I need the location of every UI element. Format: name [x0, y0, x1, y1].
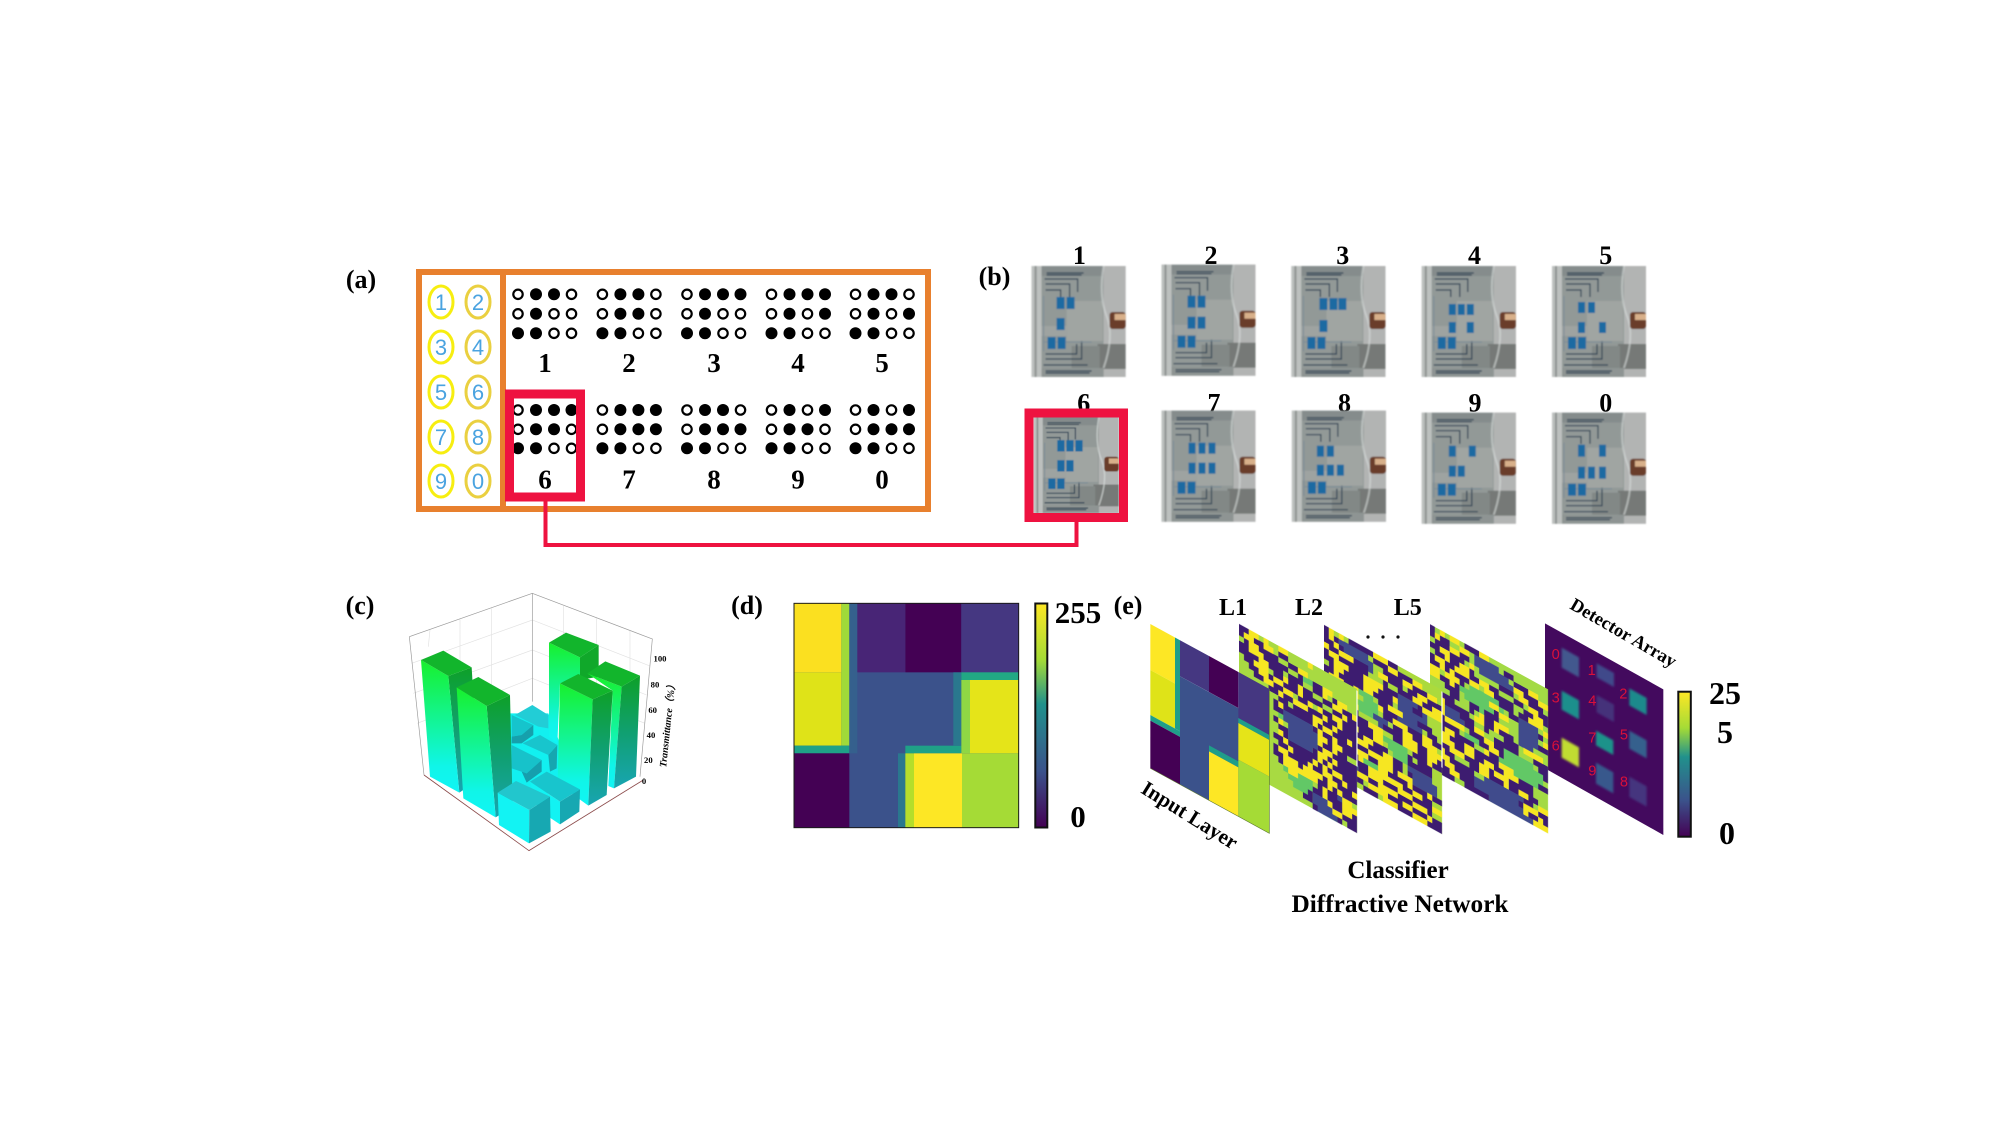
layer titles: L5	[1394, 595, 1422, 621]
panel label (d): (d)	[731, 591, 763, 620]
photo digit labels: 7	[1208, 388, 1220, 418]
keypad digit ellipses: 8	[472, 425, 484, 450]
detector indices: 0	[1552, 647, 1560, 663]
panel label (b): (b)	[979, 262, 1010, 291]
digit labels for dot patterns: 7	[622, 464, 636, 494]
layer titles	[1219, 595, 1422, 621]
photo digit labels	[1073, 241, 1612, 418]
photo digit labels: 0	[1599, 388, 1612, 418]
panel b: chip photographs	[1029, 241, 1646, 524]
photo digit labels: 4	[1468, 241, 1481, 270]
panel label (a): (a)	[346, 265, 376, 294]
digit labels for dot patterns: 3	[707, 348, 721, 378]
z axis title: Transmittance（%）	[657, 679, 678, 768]
panel e: diffractive network	[1137, 595, 1741, 918]
detector indices: 5	[1620, 727, 1628, 743]
L2 front edge highlight	[1441, 692, 1443, 768]
photo digit labels: 2	[1204, 241, 1218, 270]
detector cells	[1562, 648, 1647, 807]
detector array plane	[1545, 623, 1663, 835]
z axis tick labels: 20	[644, 755, 653, 765]
keypad digit ellipses: 4	[472, 335, 484, 360]
detector indices: 9	[1588, 764, 1596, 780]
keypad digit ellipses: 3	[435, 335, 447, 360]
panel label (c): (c)	[346, 591, 374, 620]
detector indices: 6	[1552, 739, 1560, 755]
photo digit labels: 3	[1336, 241, 1349, 270]
keypad digit ellipses: 5	[435, 380, 447, 405]
orange frame	[419, 272, 928, 509]
output colour bar: 5	[1717, 714, 1733, 750]
photo 1	[1032, 266, 1126, 377]
digit labels for dot patterns: 0	[875, 464, 889, 494]
digit labels for dot patterns: 1	[538, 348, 552, 378]
keypad digit ellipses	[429, 286, 490, 497]
photo digit labels: 9	[1468, 388, 1482, 418]
layer L5 pattern	[1430, 624, 1548, 833]
z axis tick labels	[642, 653, 666, 786]
z axis tick labels: 60	[648, 705, 657, 715]
bars	[421, 633, 640, 843]
output colour bar: 0	[1719, 815, 1735, 851]
input layer	[1150, 624, 1269, 833]
detector indices: 2	[1619, 686, 1627, 702]
keypad digit ellipses: 2	[472, 290, 484, 315]
panel a: braille dot patterns	[419, 272, 928, 509]
panel c: 3D transmittance bar chart	[409, 593, 678, 851]
photo 9	[1422, 413, 1516, 524]
photo 6 with red frame	[1029, 413, 1124, 518]
digit labels for dot patterns: 4	[791, 348, 805, 378]
photo 0	[1552, 413, 1646, 524]
detector array caption: Detector Array	[1566, 595, 1680, 673]
photo 4	[1422, 266, 1516, 377]
z axis tick labels: 100	[654, 653, 666, 663]
photo 2	[1162, 265, 1256, 376]
detector indices: 3	[1552, 690, 1560, 706]
detector indices: 4	[1588, 694, 1596, 710]
photo 5	[1552, 266, 1646, 377]
detector indices: 8	[1620, 775, 1628, 791]
digit labels for dot patterns: 2	[622, 348, 636, 378]
photo digit labels: 1	[1073, 241, 1086, 270]
output colour bar	[1678, 675, 1741, 851]
photo 8	[1292, 411, 1386, 522]
photo digit labels: 5	[1599, 241, 1612, 270]
keypad digit ellipses: 0	[472, 469, 484, 494]
z axis tick labels: 40	[647, 730, 655, 740]
detector indices	[1552, 647, 1628, 791]
keypad digit ellipses: 7	[435, 425, 447, 450]
input layer caption: Input Layer	[1137, 776, 1242, 854]
heatmap colour bar: 255	[1055, 595, 1101, 630]
digit labels for dot patterns: 9	[791, 464, 805, 494]
keypad digit ellipses: 1	[435, 290, 447, 315]
photo digit labels: 6	[1077, 388, 1090, 418]
output colour bar: 25	[1709, 675, 1741, 711]
z axis tick labels: 80	[651, 679, 659, 689]
dot matrix row 2	[512, 404, 915, 454]
heatmap colour bar	[1035, 595, 1101, 834]
keypad digit ellipses: 6	[472, 380, 484, 405]
red connector between panels a and b	[546, 501, 1076, 545]
digit labels for dot patterns: 5	[875, 348, 889, 378]
layer L1 pattern	[1239, 624, 1357, 833]
panel label (e): (e)	[1114, 591, 1142, 620]
z axis tick labels: 0	[642, 776, 646, 786]
photo digit labels: 8	[1338, 388, 1351, 418]
dot matrix row 1	[512, 288, 915, 339]
classifier caption: Classifier	[1347, 857, 1449, 884]
panel d: input heatmap	[794, 603, 1019, 828]
detector indices: 1	[1588, 663, 1596, 679]
chart box and grid	[409, 593, 652, 851]
red highlight box on digit 6	[510, 394, 580, 497]
photo 3	[1291, 266, 1385, 377]
keypad digit ellipses: 9	[435, 469, 447, 494]
digit labels for dot patterns	[538, 348, 889, 494]
photo 7	[1162, 411, 1256, 522]
L1 front edge highlight	[1356, 691, 1358, 767]
digit labels for dot patterns: 6	[538, 464, 552, 494]
layer titles: L1	[1219, 595, 1247, 621]
ellipsis dots	[1366, 635, 1400, 639]
detector indices: 7	[1588, 730, 1596, 746]
digit labels for dot patterns: 8	[707, 464, 721, 494]
diffractive network caption: Diffractive Network	[1291, 890, 1509, 918]
heatmap colour bar: 0	[1070, 799, 1086, 834]
layer titles: L2	[1295, 595, 1323, 621]
layer L2 pattern	[1324, 625, 1442, 834]
